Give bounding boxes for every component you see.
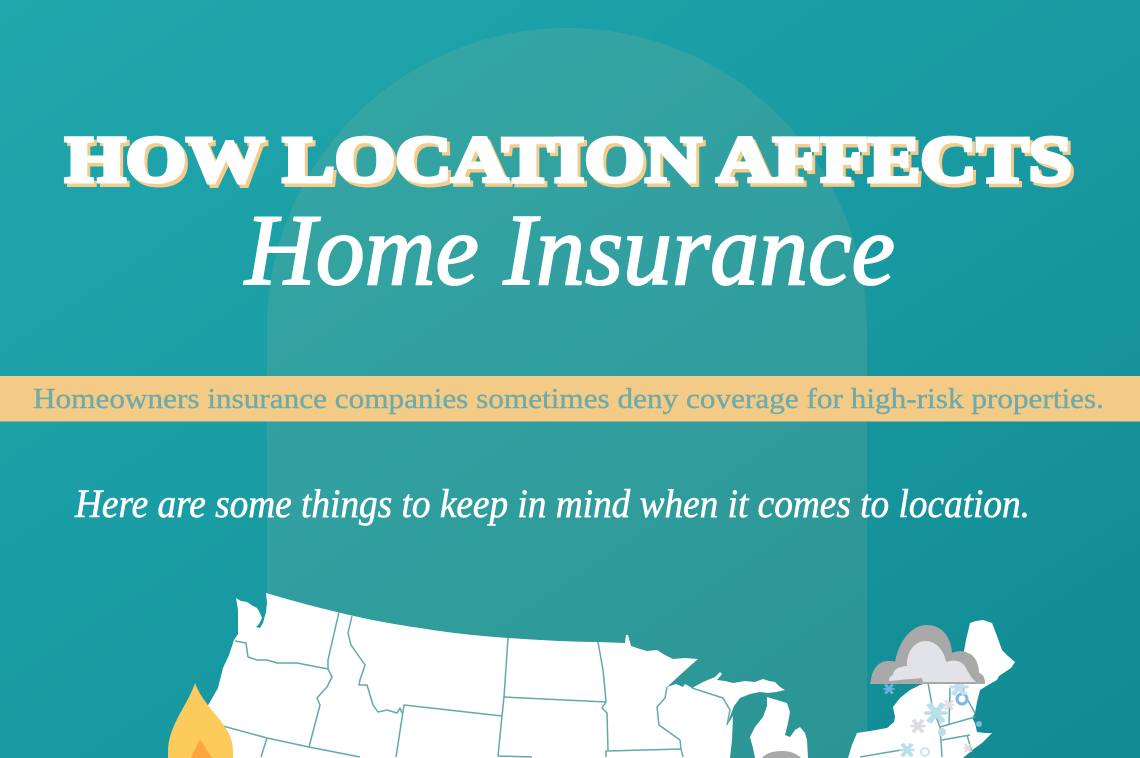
- state borders: [223, 612, 975, 757]
- cloud: dark back: [870, 625, 985, 684]
- icon: storm cloud: [870, 625, 985, 684]
- banner: [0, 376, 1140, 422]
- icon: lower storm cloud: [762, 751, 801, 758]
- US map: [185, 593, 1015, 758]
- icon: flame: [168, 683, 233, 758]
- cloud: light front: [889, 641, 976, 682]
- arch shape: [267, 28, 867, 758]
- icon: snowfall: [884, 680, 982, 756]
- subtitle: Home Insurance: Home Insurance: [243, 194, 895, 307]
- banner text: Homeowners insurance companies sometimes deny coverage for high-risk properties.: [33, 383, 1104, 415]
- map land: [185, 593, 1015, 758]
- title: HOW LOCATION AFFECTS: [65, 124, 1072, 196]
- intro line: Here are some things to keep in mind when it comes to location.: [74, 481, 1030, 526]
- title: HOW LOCATION AFFECTS: [68, 127, 1075, 200]
